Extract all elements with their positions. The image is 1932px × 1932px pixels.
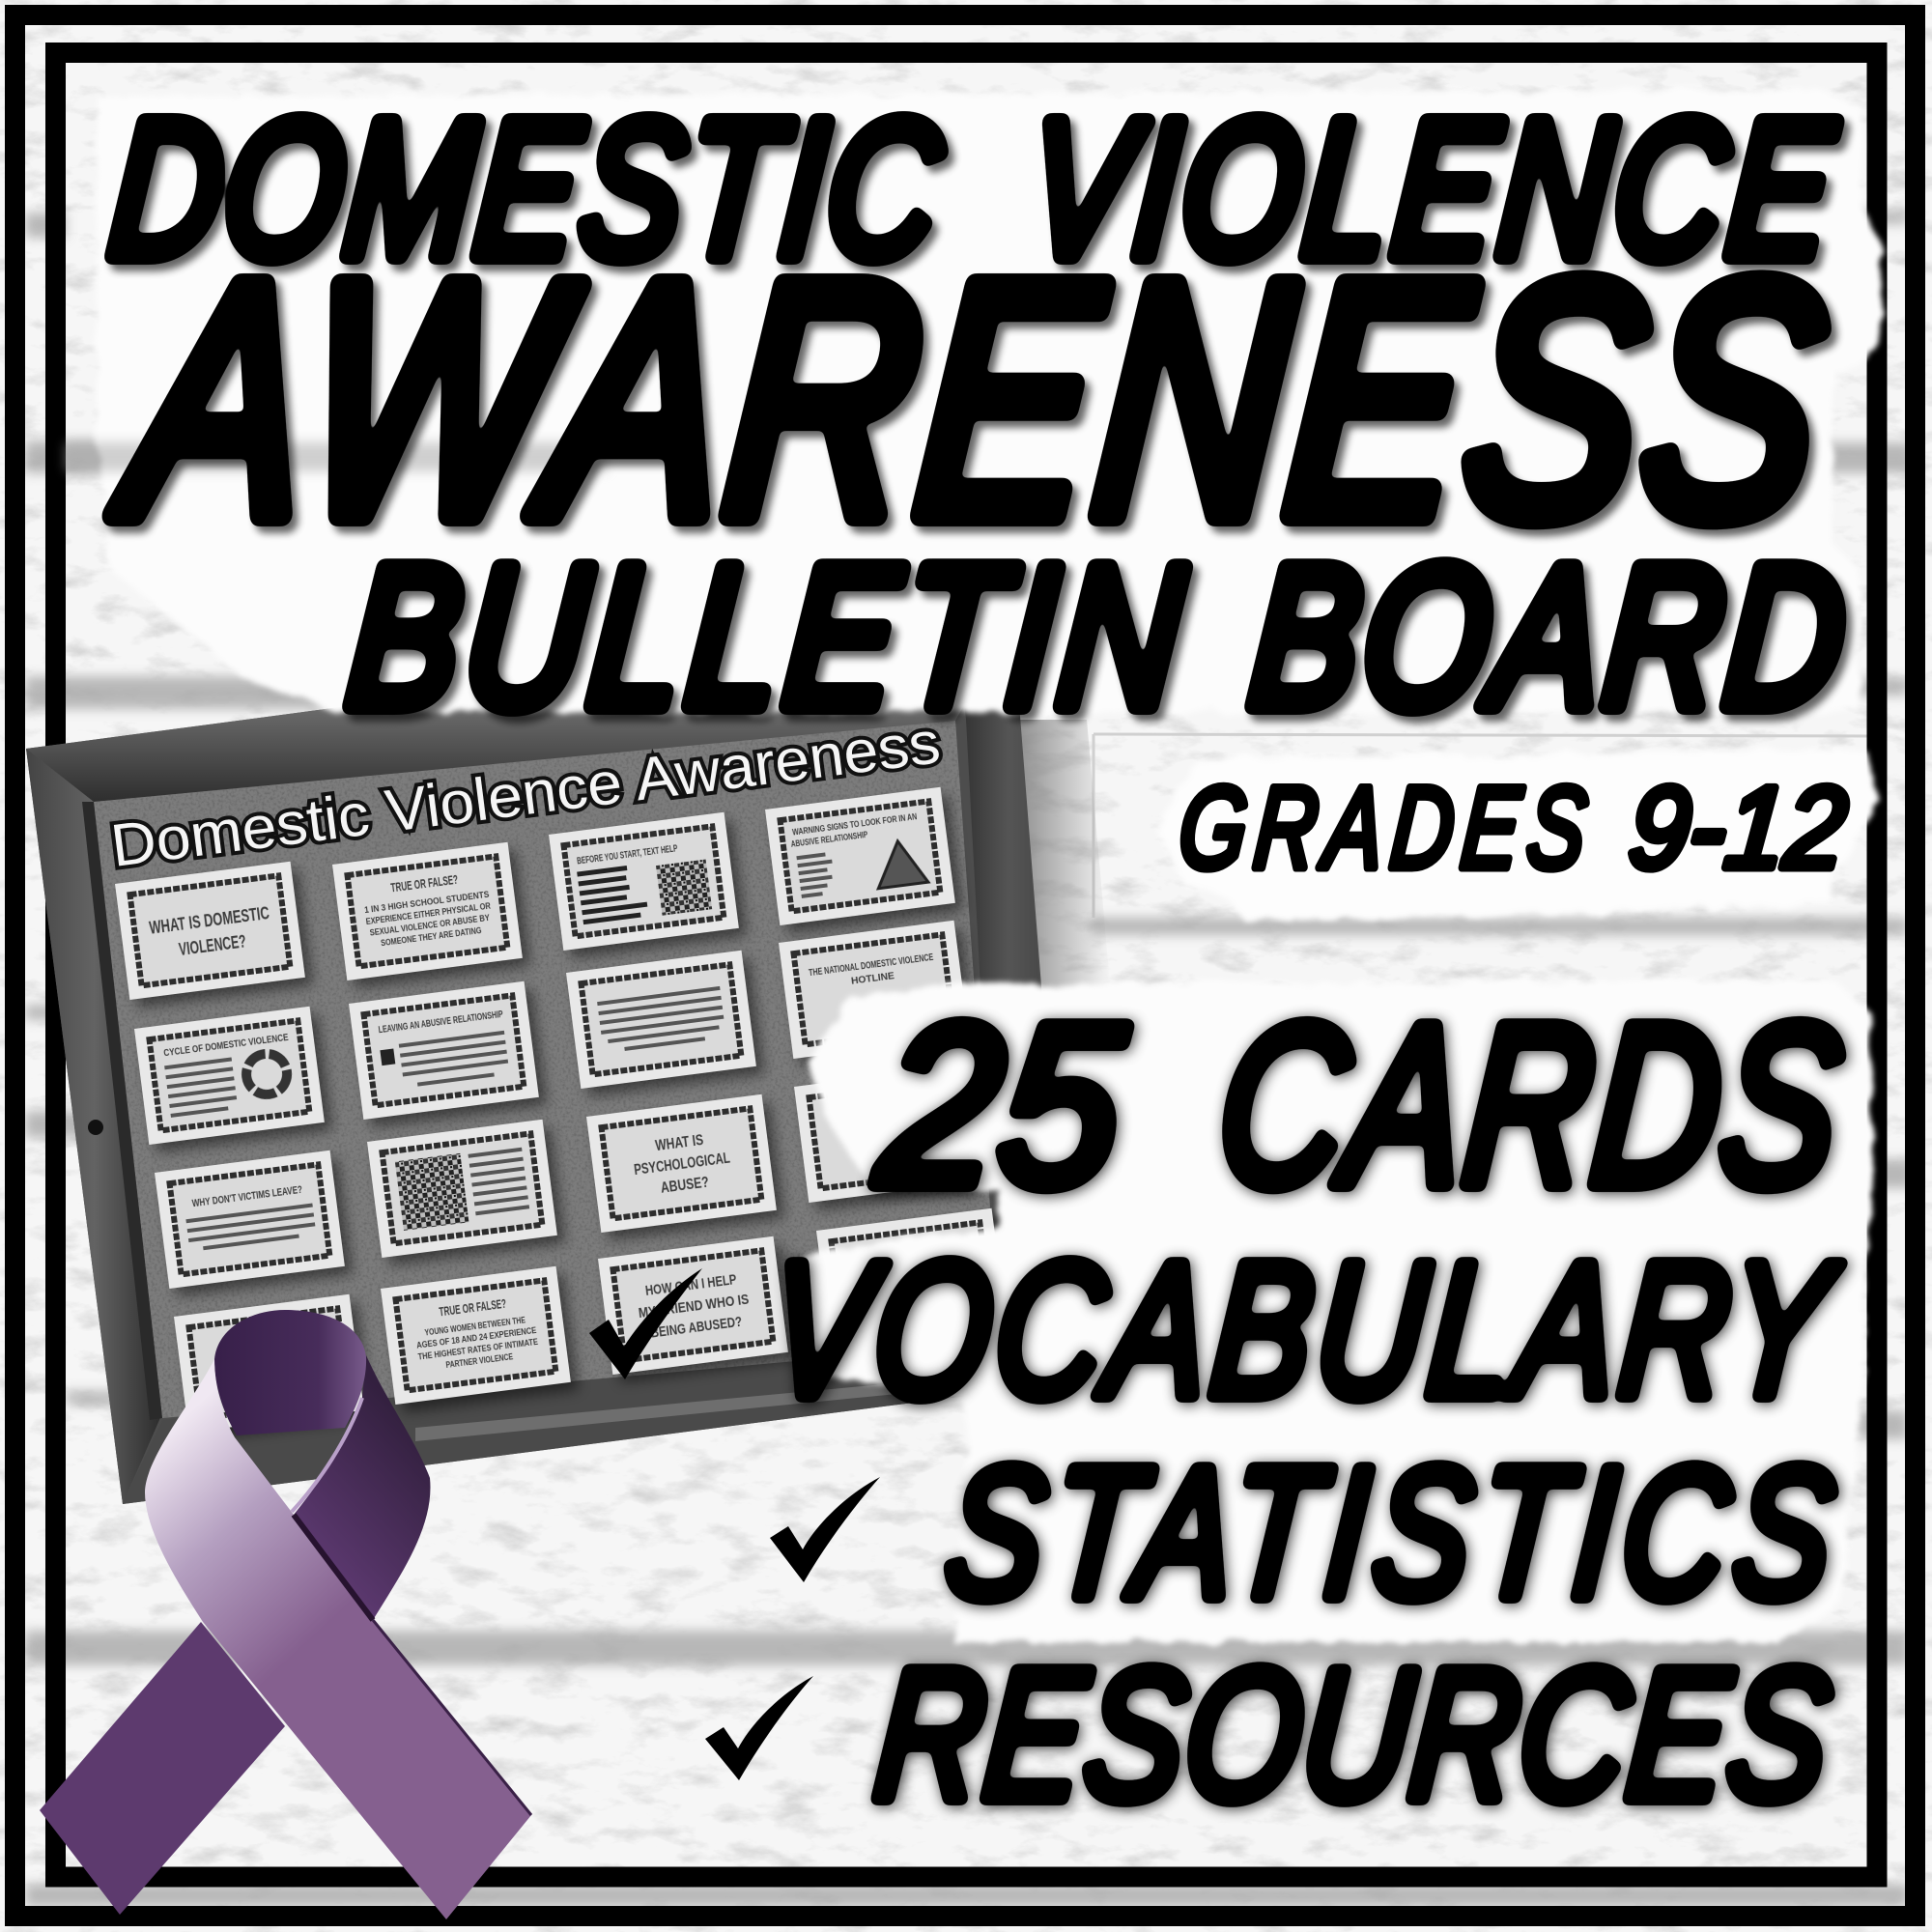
title: domestic violence — [102, 81, 1842, 298]
card: true or false 2: TRUE OR FALSE? — [439, 1296, 507, 1319]
card: what is domestic violence: WHAT IS DOMESTIC — [148, 903, 270, 938]
card: psychological abuse: PSYCHOLOGICAL — [633, 1151, 731, 1179]
resources item: RESOURCES — [867, 1631, 1837, 1839]
statistics item: STATISTICS — [938, 1428, 1841, 1636]
cork board surface — [82, 721, 1000, 1420]
card: true or false 2: PARTNER VIOLENCE — [445, 1351, 514, 1370]
card: warning signs: ABUSIVE RELATIONSHIP — [790, 830, 868, 849]
bulletin board photo — [26, 618, 1063, 1504]
check mark: statistics — [770, 1477, 880, 1582]
25 cards heading: CARDS — [1209, 976, 1850, 1234]
card: right column 4 — [816, 1208, 1007, 1347]
title: awareness: AWARENESS — [101, 212, 1835, 585]
title: bulletin board: BOARD — [1242, 525, 1853, 750]
white brush patch: title — [97, 89, 1882, 713]
ribbon front band — [145, 1359, 531, 1919]
card: psychological abuse — [586, 1094, 777, 1233]
card: warning signs: WARNING SIGNS TO LOOK FOR IN AN — [792, 811, 918, 838]
title: bulletin board: BULLETIN — [340, 524, 1190, 750]
title: bulletin board — [340, 524, 1853, 750]
card: true or false 1 — [332, 842, 523, 980]
card: cycle of domestic violence: CYCLE OF DOMESTIC VIOLENCE — [163, 1033, 289, 1059]
check mark: resources — [705, 1676, 813, 1780]
card: true or false 2: YOUNG WOMEN BETWEEN THE — [424, 1315, 526, 1338]
card: true or false 2: AGES OF 18 AND 24 EXPERIENCE — [416, 1325, 537, 1350]
card: right column 3 — [794, 1065, 984, 1203]
card: true or false 1: TRUE OR FALSE? — [390, 872, 459, 895]
card: how can I help: BEING ABUSED? — [650, 1314, 743, 1342]
card: how can I help: MY FRIEND WHO IS — [638, 1292, 750, 1321]
mortar line seen through title patch — [66, 442, 607, 471]
vocabulary item: VOCABULARY — [761, 1222, 1847, 1436]
card: how can I help: HOW CAN I HELP — [644, 1271, 737, 1299]
card: warning signs — [765, 787, 955, 925]
card: national hotline — [779, 921, 969, 1059]
card: how can I help — [598, 1236, 788, 1375]
ribbon left tail — [40, 1622, 285, 1915]
shadow beside board — [1012, 720, 1111, 995]
card: QR text — [367, 1120, 557, 1258]
grades label — [1175, 762, 1852, 893]
card: true or false 1: SEXUAL VIOLENCE OR ABUSE BY — [369, 913, 490, 938]
ribbon upper loop — [214, 1310, 366, 1435]
card: why don't victims leave — [155, 1151, 345, 1289]
card: true or false 1: 1 IN 3 HIGH SCHOOL STUDENTS — [364, 890, 490, 915]
card: true or false 1: EXPERIENCE EITHER PHYSICAL OR — [365, 901, 492, 926]
board frame — [26, 618, 1063, 1504]
card: what is domestic violence: VIOLENCE? — [178, 931, 247, 959]
card: what is domestic violence — [115, 862, 305, 1000]
card: psychological abuse: WHAT IS — [654, 1132, 704, 1154]
grades label: GRADES — [1175, 763, 1591, 893]
card: psychological abuse: ABUSE? — [660, 1175, 710, 1197]
25 cards heading: 25 — [869, 977, 1132, 1234]
ribbon highlight and shadow edges — [292, 1398, 531, 1815]
icon: purple awareness ribbon — [40, 1310, 531, 1919]
card: paragraph — [566, 951, 756, 1089]
ribbon back loop — [294, 1355, 430, 1620]
card: true or false 2: THE HIGHEST RATES OF INTIMATE — [417, 1337, 538, 1362]
card: why don't victims leave: WHY DON'T VICTIMS LEAVE? — [191, 1184, 303, 1209]
card: QR list — [549, 812, 739, 951]
white brush patch: cards and list — [804, 980, 1872, 1642]
check mark: vocabulary — [589, 1268, 702, 1379]
board title: Domestic Violence Awareness — [107, 709, 944, 880]
white brush patch: grades — [1157, 749, 1881, 923]
card: bottom left — [174, 1294, 364, 1433]
card: true or false 1: SOMEONE THEY ARE DATING — [381, 925, 482, 948]
25 cards heading — [869, 976, 1850, 1234]
card: national hotline: THE NATIONAL DOMESTIC VIOLENCE — [809, 952, 934, 979]
card: QR list: BEFORE YOU START, TEXT HELP — [577, 843, 678, 867]
card: true or false 2 — [381, 1266, 571, 1405]
title: domestic violence: VIOLENCE — [1020, 81, 1842, 298]
card: cycle of domestic violence — [134, 1007, 325, 1145]
card: leaving an abusive relationship: LEAVING AN ABUSIVE RELATIONSHIP — [378, 1009, 504, 1036]
card: national hotline: HOTLINE — [851, 971, 895, 987]
card: leaving an abusive relationship — [349, 981, 539, 1120]
title: domestic violence: DOMESTIC — [102, 81, 949, 298]
grades label: 9-12 — [1625, 762, 1852, 893]
